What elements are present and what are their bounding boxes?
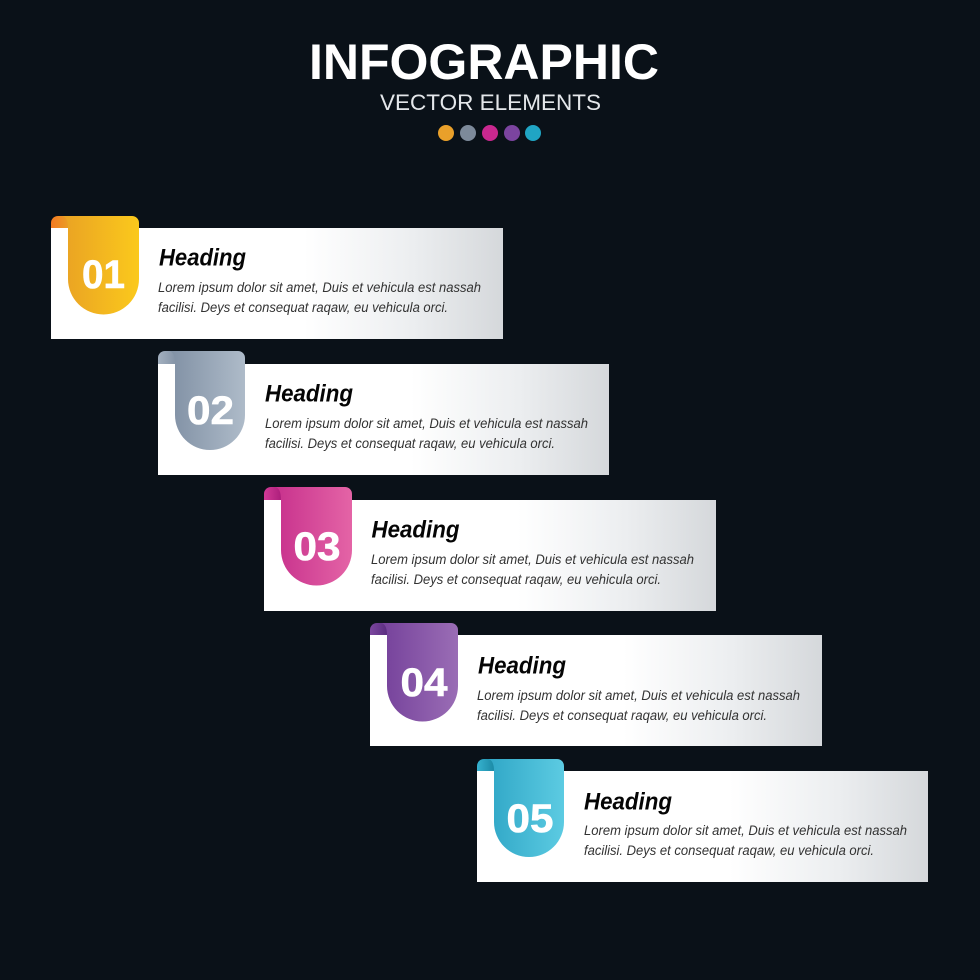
ribbon fold 04 [370,623,387,635]
ribbon fold 01 [51,216,68,228]
body text 02: facilisi. Deys et consequat raqaw, eu vehicula orci. [265,436,555,451]
body text 04: Lorem ipsum dolor sit amet, Duis et vehicula est nassah [477,688,800,703]
ribbon 01 [60,216,139,314]
ribbon fold 03 [264,487,281,500]
ribbon 03 [273,487,352,586]
body text 03: Lorem ipsum dolor sit amet, Duis et vehicula est nassah [371,552,694,567]
body text 01: Lorem ipsum dolor sit amet, Duis et vehicula est nassah [158,280,481,295]
panel: step 04 [370,623,822,746]
colour dots [438,125,541,141]
ribbon 04 [379,623,458,722]
body text 03: facilisi. Deys et consequat raqaw, eu vehicula orci. [371,572,661,587]
panel: step 03 [264,487,716,611]
number 04: 04 [400,661,448,705]
number 01: 01 [82,253,125,297]
body text 02: Lorem ipsum dolor sit amet, Duis et vehicula est nassah [265,416,588,431]
panel: step 01 [51,216,503,339]
heading 05: Heading [584,788,672,816]
ribbon fold 05 [477,759,494,771]
number 03: 03 [294,525,340,569]
subtitle: VECTOR ELEMENTS [380,90,601,115]
number 02: 02 [187,389,234,433]
number 05: 05 [506,797,554,841]
body text 05: Lorem ipsum dolor sit amet, Duis et vehicula est nassah [584,823,907,838]
panel: step 05 [477,759,928,882]
heading 01: Heading [159,244,246,272]
heading 02: Heading [265,380,353,408]
ribbon 05 [486,759,564,857]
ribbon fold 02 [158,351,175,364]
body text 01: facilisi. Deys et consequat raqaw, eu vehicula orci. [158,300,448,315]
panel: step 02 [158,351,609,475]
heading 03: Heading [372,516,460,544]
heading 04: Heading [478,652,566,680]
body text 04: facilisi. Deys et consequat raqaw, eu vehicula orci. [477,708,767,723]
ribbon 02 [167,351,245,450]
body text 05: facilisi. Deys et consequat raqaw, eu vehicula orci. [584,843,874,858]
title: INFOGRAPHIC [309,34,659,90]
